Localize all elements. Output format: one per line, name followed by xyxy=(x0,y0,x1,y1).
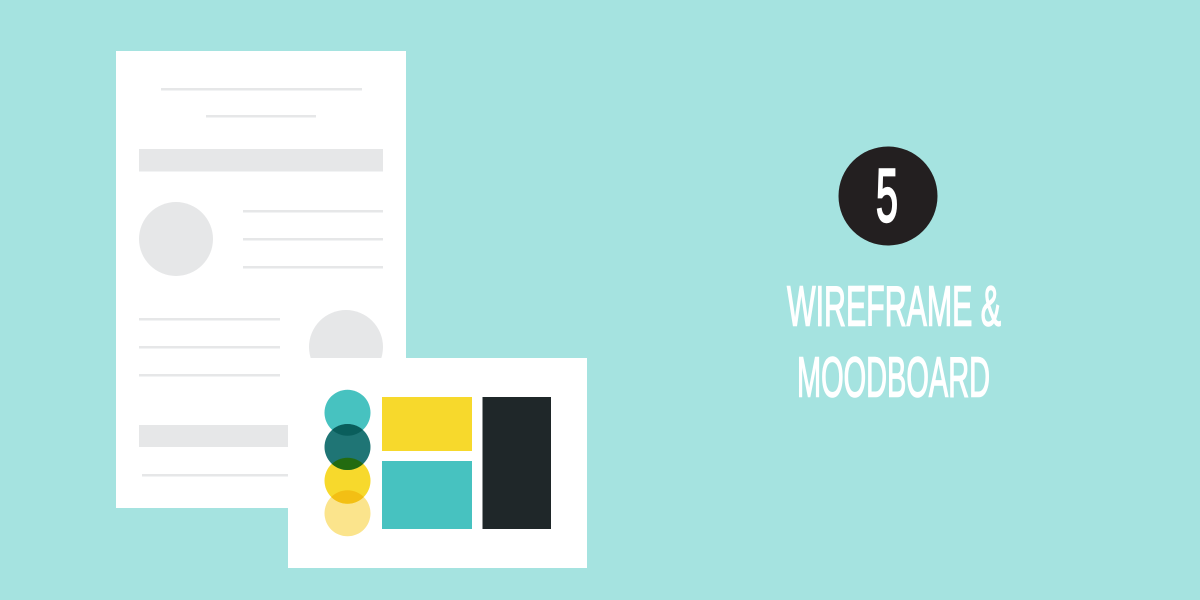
title xyxy=(787,274,1001,408)
wireframe banner two xyxy=(139,425,383,447)
wireframe bottom line xyxy=(142,474,380,476)
teal swatch xyxy=(382,461,472,529)
yellow swatch xyxy=(382,397,472,451)
wireframe text lines two xyxy=(139,318,280,376)
step number badge xyxy=(838,146,938,246)
step number badge: 5 xyxy=(876,154,898,238)
wireframe document xyxy=(116,51,406,508)
wireframe title lines xyxy=(161,88,362,118)
colour swatch circles xyxy=(324,390,370,536)
title: MOODBOARD xyxy=(797,345,990,408)
moodboard card xyxy=(288,358,587,568)
wireframe circle one xyxy=(139,202,213,276)
wireframe circle two xyxy=(309,310,383,384)
title: WIREFRAME & xyxy=(787,274,1001,337)
dark swatch xyxy=(482,397,551,529)
wireframe text lines one xyxy=(243,210,383,268)
wireframe banner xyxy=(139,149,383,172)
